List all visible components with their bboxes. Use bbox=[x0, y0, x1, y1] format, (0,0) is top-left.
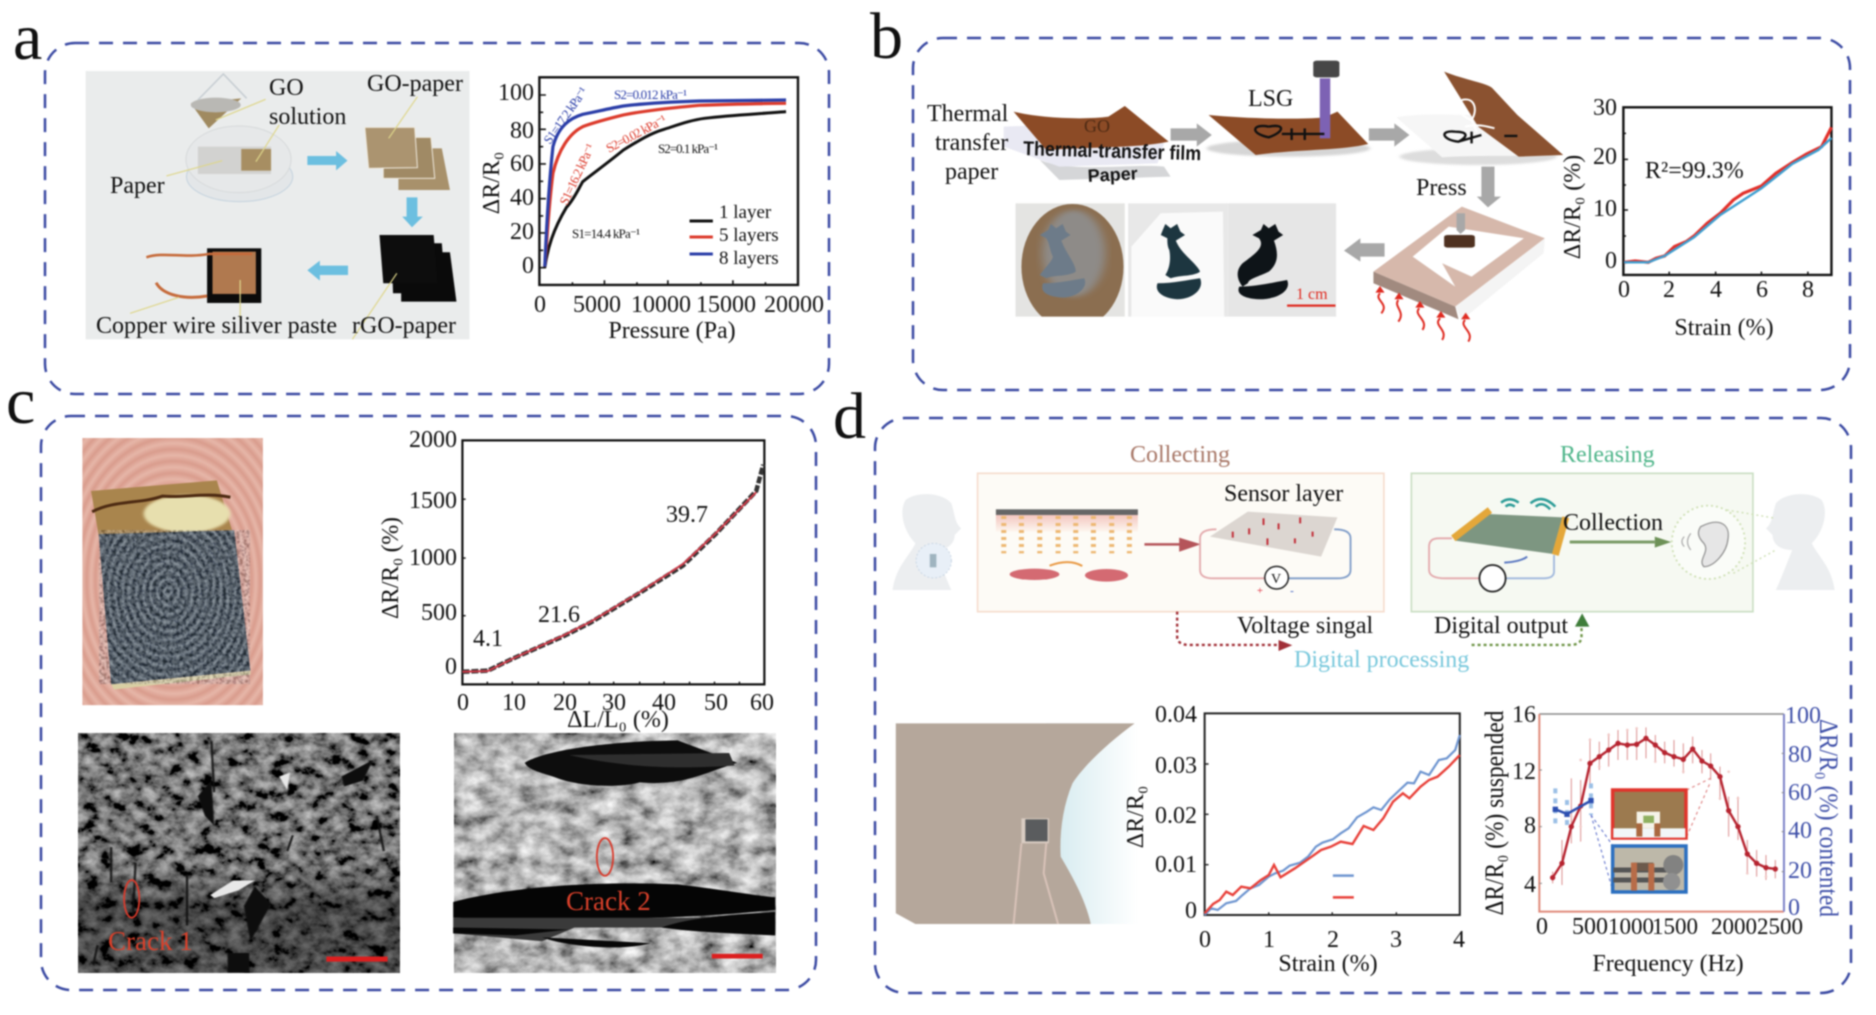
label d: d bbox=[833, 380, 866, 453]
chart d2: frequency response: 80 bbox=[1788, 742, 1812, 768]
fabrication schematic b: GO bbox=[1084, 116, 1110, 136]
chart b: strain response: R²=99.3% bbox=[1645, 158, 1744, 184]
chart c: gauge factor: 2000 bbox=[409, 427, 457, 453]
fabrication schematic b: Press bbox=[1416, 175, 1467, 201]
fabrication schematic b: Paper bbox=[1087, 163, 1138, 186]
chart d2: frequency response: 12 bbox=[1512, 759, 1536, 785]
fabrication schematic b bbox=[927, 61, 1563, 342]
fabrication schematic b: Thermal bbox=[927, 101, 1009, 127]
chart c: gauge factor: 0 bbox=[457, 690, 469, 716]
speech workflow schematic: Digital output bbox=[1434, 613, 1568, 639]
chart b: strain response: Strain (%) bbox=[1674, 315, 1774, 341]
chart d2: frequency response bbox=[1480, 702, 1843, 977]
chart b: strain response: 10 bbox=[1593, 196, 1617, 222]
fabrication schematic a: rGO-paper bbox=[352, 313, 456, 339]
chart a: pressure response: S1=16.2 kPa⁻¹ bbox=[556, 141, 598, 207]
speech workflow schematic: - bbox=[1290, 585, 1294, 597]
chart c: gauge factor: 30 bbox=[602, 690, 626, 716]
chart d2: frequency response: ΔR/R₀ (%) suspended bbox=[1480, 710, 1509, 916]
speech workflow schematic: Sensor layer bbox=[1224, 481, 1343, 507]
chart d1: strain response: 0.03 bbox=[1155, 753, 1197, 779]
chart d1: strain response: 0.04 bbox=[1155, 702, 1197, 728]
speech workflow schematic: Collecting bbox=[1130, 442, 1230, 468]
chart a: pressure response: ΔR/R₀ bbox=[479, 152, 505, 214]
chart c: gauge factor: ΔL/L₀ (%) bbox=[567, 707, 669, 733]
chart d2: frequency response: 500 bbox=[1572, 914, 1608, 940]
panel a dashed frame bbox=[45, 43, 829, 394]
chart a: pressure response bbox=[479, 77, 824, 344]
panel b: laser-scribed graphene sensor bbox=[870, 0, 1850, 390]
SEM image: crack 1: Crack 1 bbox=[108, 926, 193, 956]
chart c: gauge factor: 20 bbox=[553, 690, 577, 716]
chart b: strain response: 0 bbox=[1618, 277, 1630, 303]
chart c: gauge factor: 60 bbox=[750, 690, 774, 716]
chart d2: frequency response: 2500 bbox=[1757, 914, 1803, 939]
chart c: gauge factor bbox=[378, 427, 774, 733]
chart a: pressure response: 0 bbox=[522, 253, 534, 279]
chart c: gauge factor: 1000 bbox=[409, 545, 457, 571]
chart c: gauge factor: 39.7 bbox=[666, 502, 708, 528]
chart d1: strain response: 0 bbox=[1185, 898, 1197, 924]
chart d2: frequency response: 1500 bbox=[1652, 914, 1698, 939]
speech workflow schematic: + bbox=[1257, 585, 1263, 597]
chart d1: strain response: Strain (%) bbox=[1278, 951, 1378, 977]
chart a: pressure response: 40 bbox=[510, 185, 534, 211]
chart d2: frequency response: 16 bbox=[1512, 702, 1536, 728]
chart a: pressure response: 10000 bbox=[631, 292, 691, 318]
chart d2: frequency response: Frequency (Hz) bbox=[1592, 951, 1744, 977]
chart c: gauge factor: 10 bbox=[502, 690, 526, 716]
speech workflow schematic: Releasing bbox=[1560, 442, 1655, 468]
chart a: pressure response: 8 layers bbox=[719, 248, 779, 269]
chart c: gauge factor: 4.1 bbox=[473, 626, 503, 652]
chart a: pressure response: S2=0.012 kPa⁻¹ bbox=[614, 87, 687, 102]
speech workflow schematic: Digital processing bbox=[1294, 647, 1469, 673]
finger photo bbox=[82, 438, 263, 705]
label b: b bbox=[870, 0, 903, 73]
label c: c bbox=[6, 365, 35, 438]
speech workflow schematic: V bbox=[1271, 572, 1281, 587]
chart a: pressure response: 20 bbox=[510, 219, 534, 245]
chart a: pressure response: S1=14.4 kPa⁻¹ bbox=[572, 226, 640, 241]
chart a: pressure response: Pressure (Pa) bbox=[608, 318, 736, 344]
chart d2: frequency response: 4 bbox=[1524, 872, 1536, 898]
chart b: strain response bbox=[1560, 95, 1831, 341]
speech workflow schematic bbox=[893, 442, 1835, 673]
chart a: pressure response: 100 bbox=[498, 80, 534, 106]
fabrication schematic b: Thermal-transfer film bbox=[1023, 138, 1201, 165]
chart d2: frequency response: 20 bbox=[1788, 858, 1812, 884]
fabrication schematic a: solution bbox=[269, 104, 346, 130]
chart c: gauge factor: 40 bbox=[652, 690, 676, 716]
chart c: gauge factor: 0 bbox=[445, 654, 457, 680]
panel c dashed frame bbox=[41, 416, 816, 990]
chart a: pressure response: 0 bbox=[534, 292, 546, 318]
fabrication schematic a: Copper wire siliver paste bbox=[96, 313, 337, 339]
fabrication schematic a: GO bbox=[269, 75, 304, 101]
chart b: strain response: 8 bbox=[1802, 277, 1814, 303]
chart b: strain response: ΔR/R₀ (%) bbox=[1560, 155, 1586, 259]
speech workflow schematic: Voltage singal bbox=[1237, 613, 1374, 639]
chart a: pressure response: 15000 bbox=[696, 292, 756, 318]
chart d2: frequency response: ΔR/R₀ (%) contented bbox=[1814, 719, 1843, 917]
chart d2: frequency response: 0 bbox=[1788, 895, 1800, 921]
chart c: gauge factor: 50 bbox=[704, 690, 728, 716]
chart d2: frequency response: 2000 bbox=[1711, 914, 1757, 939]
chart d1: strain response: 0.01 bbox=[1155, 852, 1197, 878]
chart a: pressure response: 5 layers bbox=[719, 225, 779, 246]
fabrication schematic a: GO-paper bbox=[367, 71, 463, 97]
chart a: pressure response: 20000 bbox=[764, 292, 824, 318]
chart d1: strain response: 1 bbox=[1263, 927, 1275, 953]
fabrication schematic a bbox=[86, 71, 469, 339]
panel d dashed frame bbox=[875, 418, 1851, 993]
chart a: pressure response: S2=0.1 kPa⁻¹ bbox=[658, 141, 718, 156]
chart d2: frequency response: 100 bbox=[1785, 703, 1821, 729]
fabrication schematic b: transfer bbox=[935, 130, 1008, 156]
chart c: gauge factor: 1500 bbox=[409, 488, 457, 514]
chart c: gauge factor: ΔR/R₀ (%) bbox=[378, 517, 404, 619]
chart d2: frequency response: 0 bbox=[1536, 914, 1548, 940]
chart d1: strain response: 0.02 bbox=[1155, 803, 1197, 829]
chart d1: strain response: 2 bbox=[1327, 927, 1339, 953]
chart d1: strain response: ΔR/R₀ bbox=[1123, 786, 1149, 848]
fabrication schematic a: Paper bbox=[110, 173, 165, 199]
panel b dashed frame bbox=[913, 38, 1850, 390]
speech workflow schematic: Collection bbox=[1563, 510, 1663, 536]
chart c: gauge factor: 500 bbox=[421, 600, 457, 626]
chart a: pressure response: 5000 bbox=[573, 292, 621, 318]
SEM image: crack 2 bbox=[453, 733, 776, 973]
chart a: pressure response: 60 bbox=[510, 151, 534, 177]
chart b: strain response: 20 bbox=[1593, 144, 1617, 170]
chart a: pressure response: 80 bbox=[510, 118, 534, 144]
SEM image: crack 1 bbox=[78, 733, 400, 973]
fabrication schematic b: LSG bbox=[1248, 86, 1293, 112]
panel c: crack-based strain sensor bbox=[6, 365, 816, 990]
chart a: pressure response: 1 layer bbox=[719, 202, 772, 223]
chart b: strain response: 4 bbox=[1710, 277, 1722, 303]
chart b: strain response: 0 bbox=[1605, 248, 1617, 274]
chart d2: frequency response: 60 bbox=[1788, 780, 1812, 806]
panel d: voice recognition sensor bbox=[833, 380, 1851, 993]
chart d1: strain response: 4 bbox=[1453, 927, 1465, 953]
chart b: strain response: 2 bbox=[1663, 277, 1675, 303]
chart d1: strain response: 0 bbox=[1199, 927, 1211, 953]
chart d2: frequency response: 40 bbox=[1788, 818, 1812, 844]
panel a: paper-based rGO pressure sensor bbox=[13, 1, 829, 394]
chart b: strain response: 6 bbox=[1756, 277, 1768, 303]
neck photo with sensor bbox=[896, 723, 1138, 924]
label a: a bbox=[13, 1, 42, 74]
SEM image: crack 2: Crack 2 bbox=[566, 886, 651, 916]
fabrication schematic b: 1 cm bbox=[1296, 286, 1328, 303]
chart a: pressure response: S1=17.2 kPa⁻¹ bbox=[540, 84, 590, 147]
chart d2: frequency response: 1000 bbox=[1608, 914, 1654, 939]
chart d1: strain response bbox=[1123, 702, 1465, 977]
chart a: pressure response: S2=0.02 kPa⁻¹ bbox=[603, 111, 669, 156]
chart d1: strain response: 3 bbox=[1390, 927, 1402, 953]
chart d2: frequency response: 8 bbox=[1524, 813, 1536, 839]
fabrication schematic b: paper bbox=[945, 159, 998, 185]
chart b: strain response: 30 bbox=[1593, 95, 1617, 121]
chart c: gauge factor: 21.6 bbox=[538, 602, 580, 628]
